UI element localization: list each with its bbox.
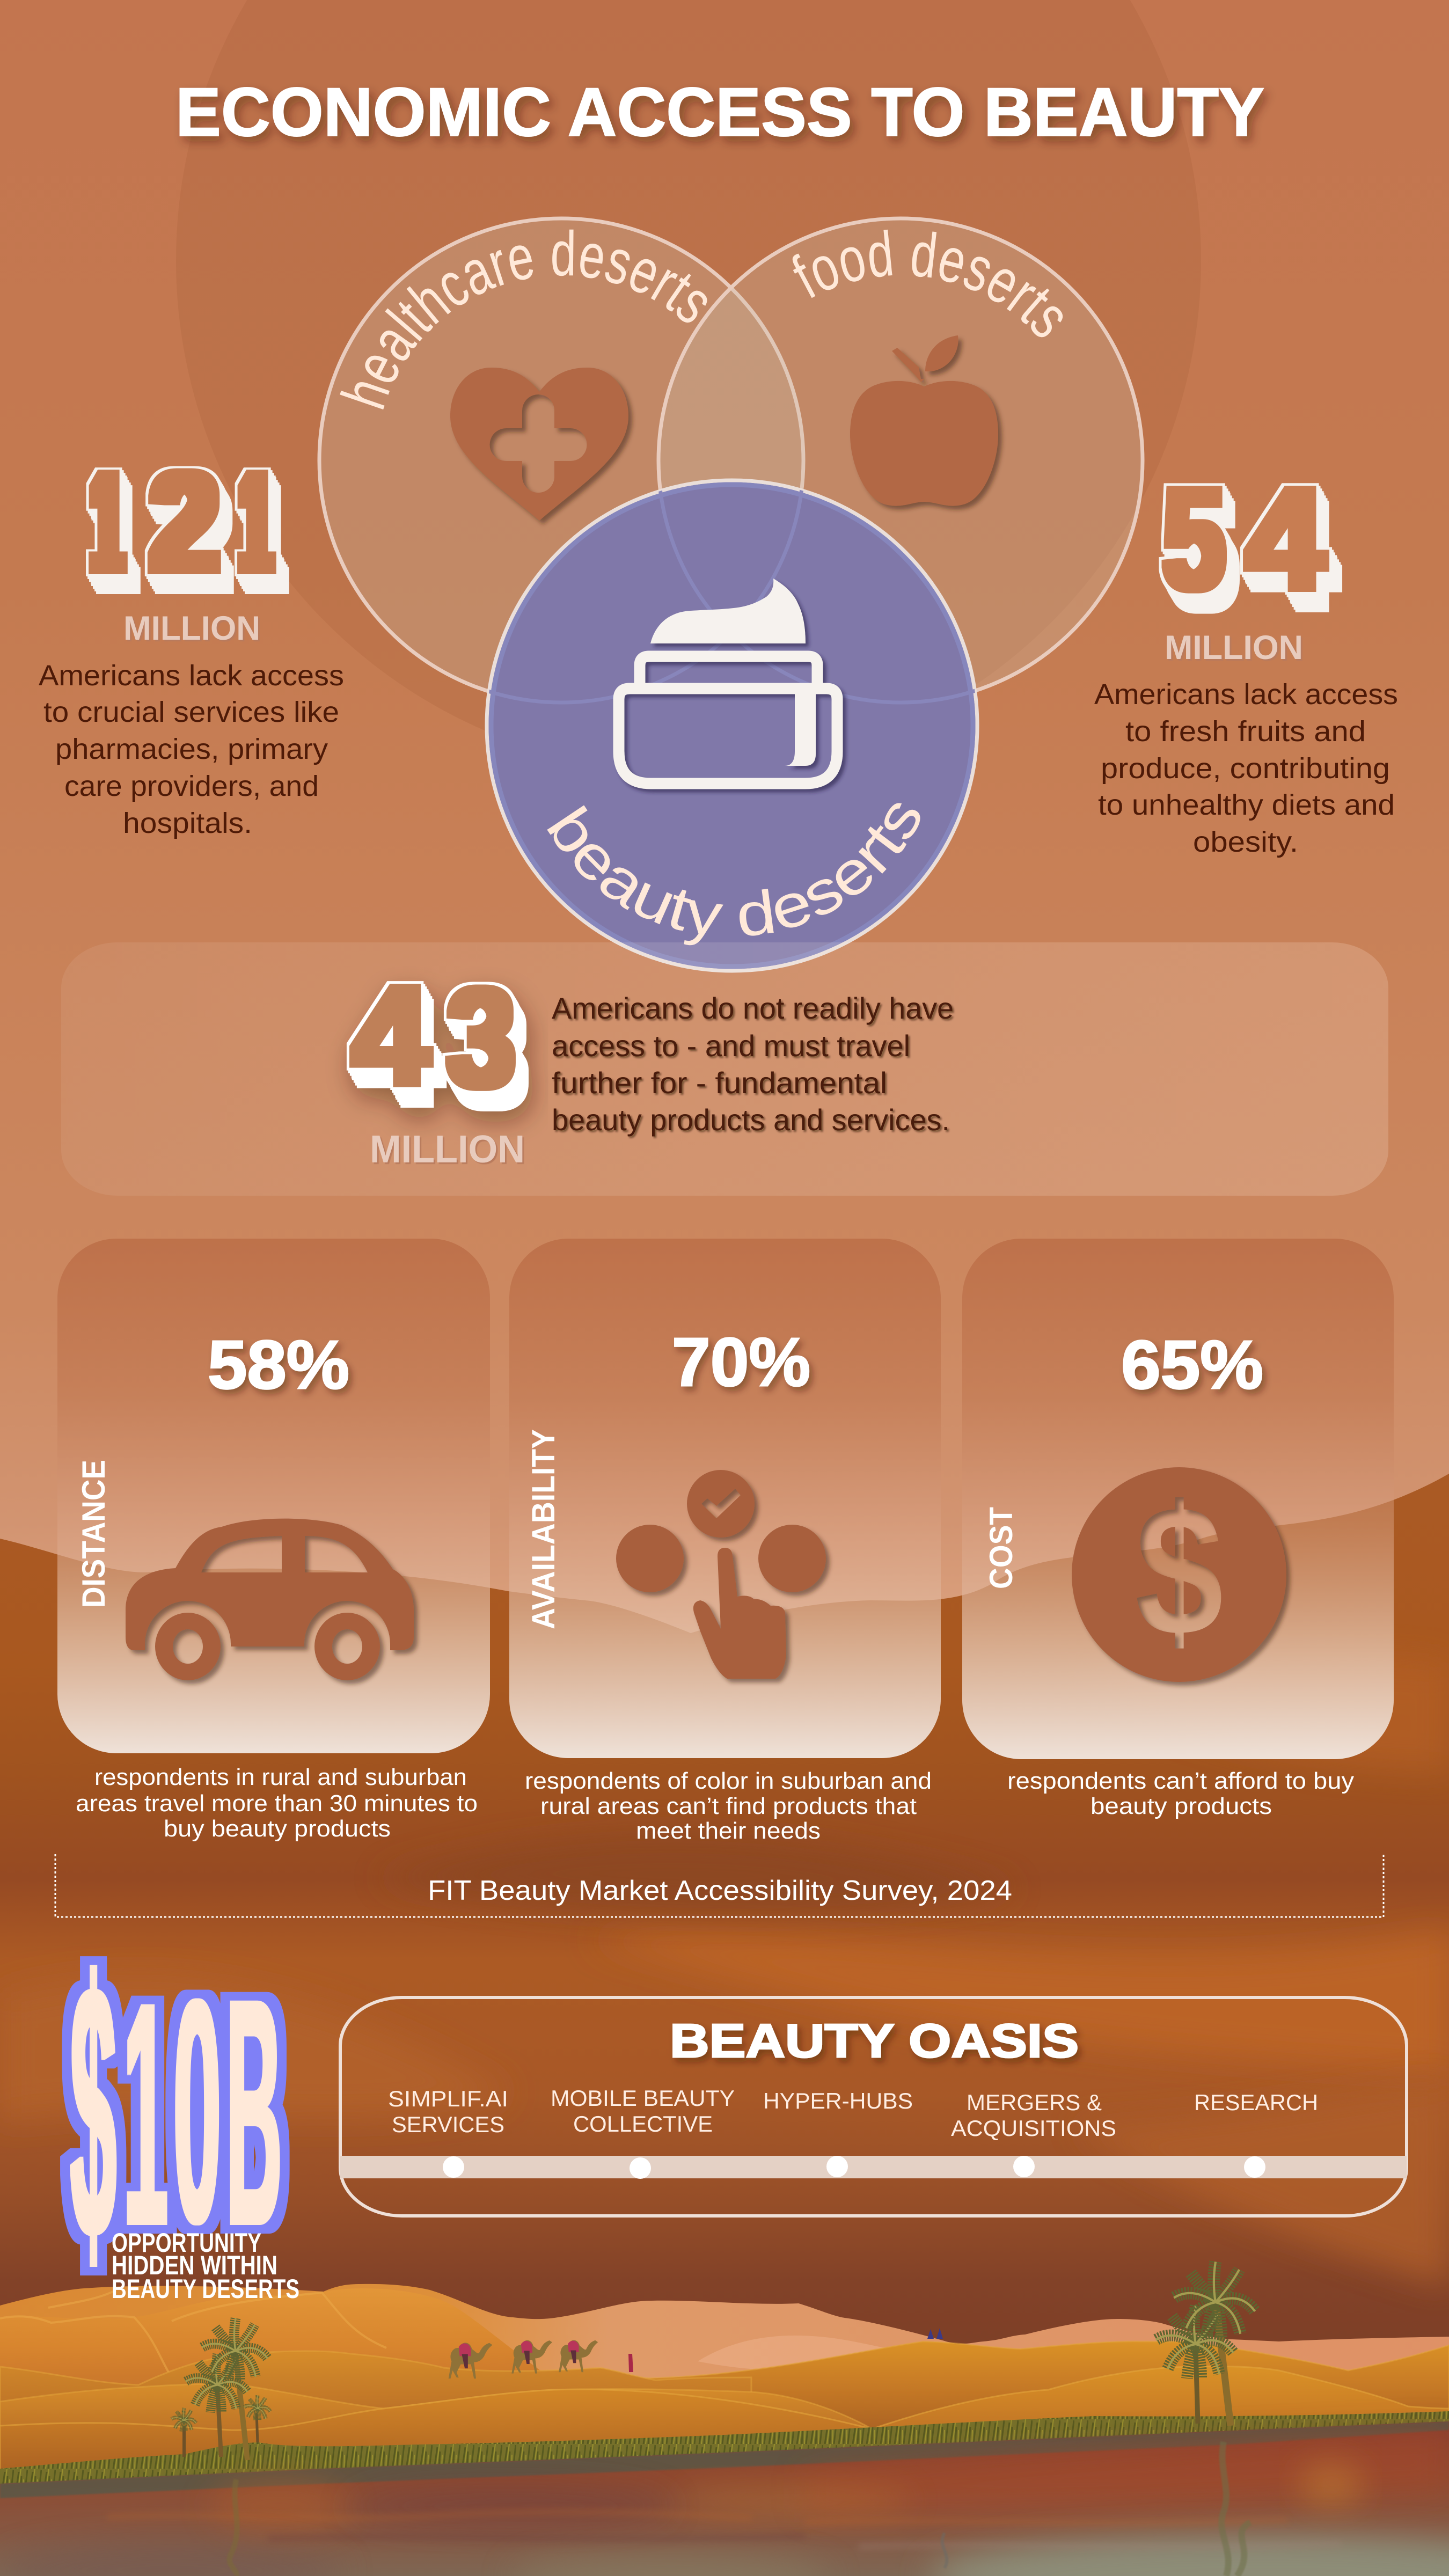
caption: meet their needs [636, 1818, 821, 1844]
description: to fresh fruits and [1125, 715, 1366, 748]
camels and travellers [449, 2328, 943, 2379]
title: ECONOMIC ACCESS TO BEAUTY [175, 74, 1264, 151]
description: obesity. [1193, 826, 1298, 858]
description [39, 660, 344, 839]
icon: hand with choices [616, 1470, 826, 1679]
description: Americans lack access [39, 660, 344, 692]
venn: healthcare deserts circle [319, 218, 803, 702]
icon: dollar coin [1072, 1467, 1286, 1682]
label: healthcare deserts: healthcare deserts [340, 230, 707, 409]
caption: rural areas can’t find products that [540, 1793, 917, 1819]
number 121: 2 [151, 443, 218, 599]
icon: cream jar [619, 579, 837, 784]
big figure: 1 [123, 1935, 168, 2292]
big figure: 0 [173, 1934, 221, 2290]
card: availability [509, 1239, 941, 1844]
source box [55, 1854, 1384, 1917]
caption: areas travel more than 30 minutes to [76, 1790, 478, 1817]
palm reflections [230, 2442, 1250, 2576]
vertical label cost: COST [983, 1507, 1019, 1589]
palm trees left [171, 2318, 270, 2460]
big figure [70, 1906, 282, 2317]
description: access to - and must travel [552, 1029, 910, 1063]
description [552, 991, 954, 1137]
caption: respondents of color in suburban and [525, 1768, 932, 1794]
timeline labels: ACQUISITIONS [951, 2116, 1116, 2141]
description: to unhealthy diets and [1098, 789, 1395, 821]
label: food deserts: food deserts [792, 230, 1063, 337]
big figure: B [226, 1931, 282, 2294]
vertical label distance: DISTANCE [76, 1460, 112, 1608]
number 43 [352, 958, 515, 1115]
percent 58: 58% [208, 1327, 349, 1403]
number 121: 1 [93, 444, 121, 600]
venn: beauty deserts circle [485, 479, 979, 972]
caption: beauty products [1091, 1793, 1272, 1819]
percent 65: 65% [1121, 1327, 1263, 1403]
description: Americans do not readily have [552, 991, 954, 1025]
sub label: OPPORTUNITY [112, 2228, 261, 2258]
palm trees right [1156, 2262, 1255, 2426]
dune light and shadow bands [0, 1657, 1449, 2286]
caption: respondents can’t afford to buy [1007, 1768, 1354, 1794]
front dune left [0, 2384, 872, 2490]
sub label: BEAUTY DESERTS [112, 2274, 299, 2304]
number 43: 4 [352, 958, 430, 1114]
upper sandy sky [0, 0, 1449, 1637]
description: to crucial services like [43, 696, 339, 728]
description: beauty products and services. [552, 1103, 950, 1137]
description [1094, 678, 1398, 858]
description: care providers, and [64, 770, 319, 802]
orange left dunes [0, 2288, 590, 2404]
timeline labels: RESEARCH [1194, 2090, 1318, 2115]
pale dune facets [698, 2336, 923, 2370]
card: cost [962, 1239, 1394, 1819]
card: distance [57, 1239, 490, 1842]
pale far dunes [0, 2284, 1449, 2479]
number 54: 4 [1246, 458, 1326, 619]
source text: FIT Beauty Market Accessibility Survey, 2024 [428, 1875, 1012, 1906]
timeline labels: COLLECTIVE [573, 2111, 713, 2136]
caption: buy beauty products [164, 1816, 391, 1842]
panel: beauty oasis timeline [340, 1997, 1407, 2216]
panel: 43 million beauty deserts [61, 942, 1388, 1196]
timeline labels: MOBILE BEAUTY [551, 2085, 735, 2111]
caption [1007, 1768, 1354, 1819]
caption: respondents in rural and suburban [94, 1764, 467, 1790]
icon: apple [850, 335, 998, 506]
timeline labels: SERVICES [392, 2112, 504, 2137]
number 121 [93, 443, 270, 600]
million label: MILLION [123, 610, 260, 647]
stat: 121 million [39, 443, 344, 839]
million label: MILLION [1165, 629, 1303, 667]
amber dune left [0, 2351, 751, 2479]
water ripples [107, 2512, 1342, 2547]
label: beauty deserts: beauty deserts [533, 786, 936, 950]
timeline labels: MERGERS & [967, 2090, 1102, 2115]
timeline dots [443, 2156, 1265, 2179]
icon: car [126, 1519, 414, 1680]
sub label: HIDDEN WITHIN [112, 2250, 277, 2280]
number 43: 3 [447, 959, 515, 1115]
water [0, 2421, 1449, 2576]
million label: MILLION [370, 1128, 525, 1171]
$10B opportunity callout [70, 1906, 299, 2317]
caption [525, 1768, 932, 1844]
number 54 [1163, 458, 1326, 619]
large backdrop circle [176, 0, 1201, 773]
amber middle dunes right [633, 2341, 1449, 2447]
mid dune left [0, 1539, 912, 2372]
foreground dune [0, 2366, 1449, 2490]
mid dune right [590, 1474, 1449, 2372]
number 54: 5 [1163, 458, 1225, 619]
sub label [112, 2228, 299, 2304]
description: pharmacies, primary [55, 733, 328, 765]
grass strip [0, 2411, 1449, 2486]
timeline bar [340, 2156, 1407, 2178]
big figure: $ [70, 1906, 116, 2317]
water colour reflections [0, 2431, 1449, 2576]
percent 70: 70% [672, 1324, 810, 1401]
timeline labels [388, 2085, 1318, 2141]
icon: heart with medical cross [450, 368, 628, 521]
description: produce, contributing [1101, 752, 1390, 785]
description: further for - fundamental [552, 1066, 887, 1100]
venn: food deserts circle [658, 218, 1143, 702]
shoreline band [0, 2421, 1449, 2498]
caption [76, 1764, 478, 1842]
stat: 54 million [1094, 458, 1398, 858]
number 121: 1 [241, 444, 270, 600]
description: hospitals. [123, 807, 252, 839]
vertical label availability: AVAILABILITY [525, 1429, 561, 1629]
timeline labels: SIMPLIF.AI [388, 2086, 508, 2111]
description: Americans lack access [1094, 678, 1398, 711]
dune ridge lines [0, 2290, 386, 2377]
heading: BEAUTY OASIS [670, 2014, 1079, 2067]
timeline labels: HYPER-HUBS [763, 2088, 913, 2113]
